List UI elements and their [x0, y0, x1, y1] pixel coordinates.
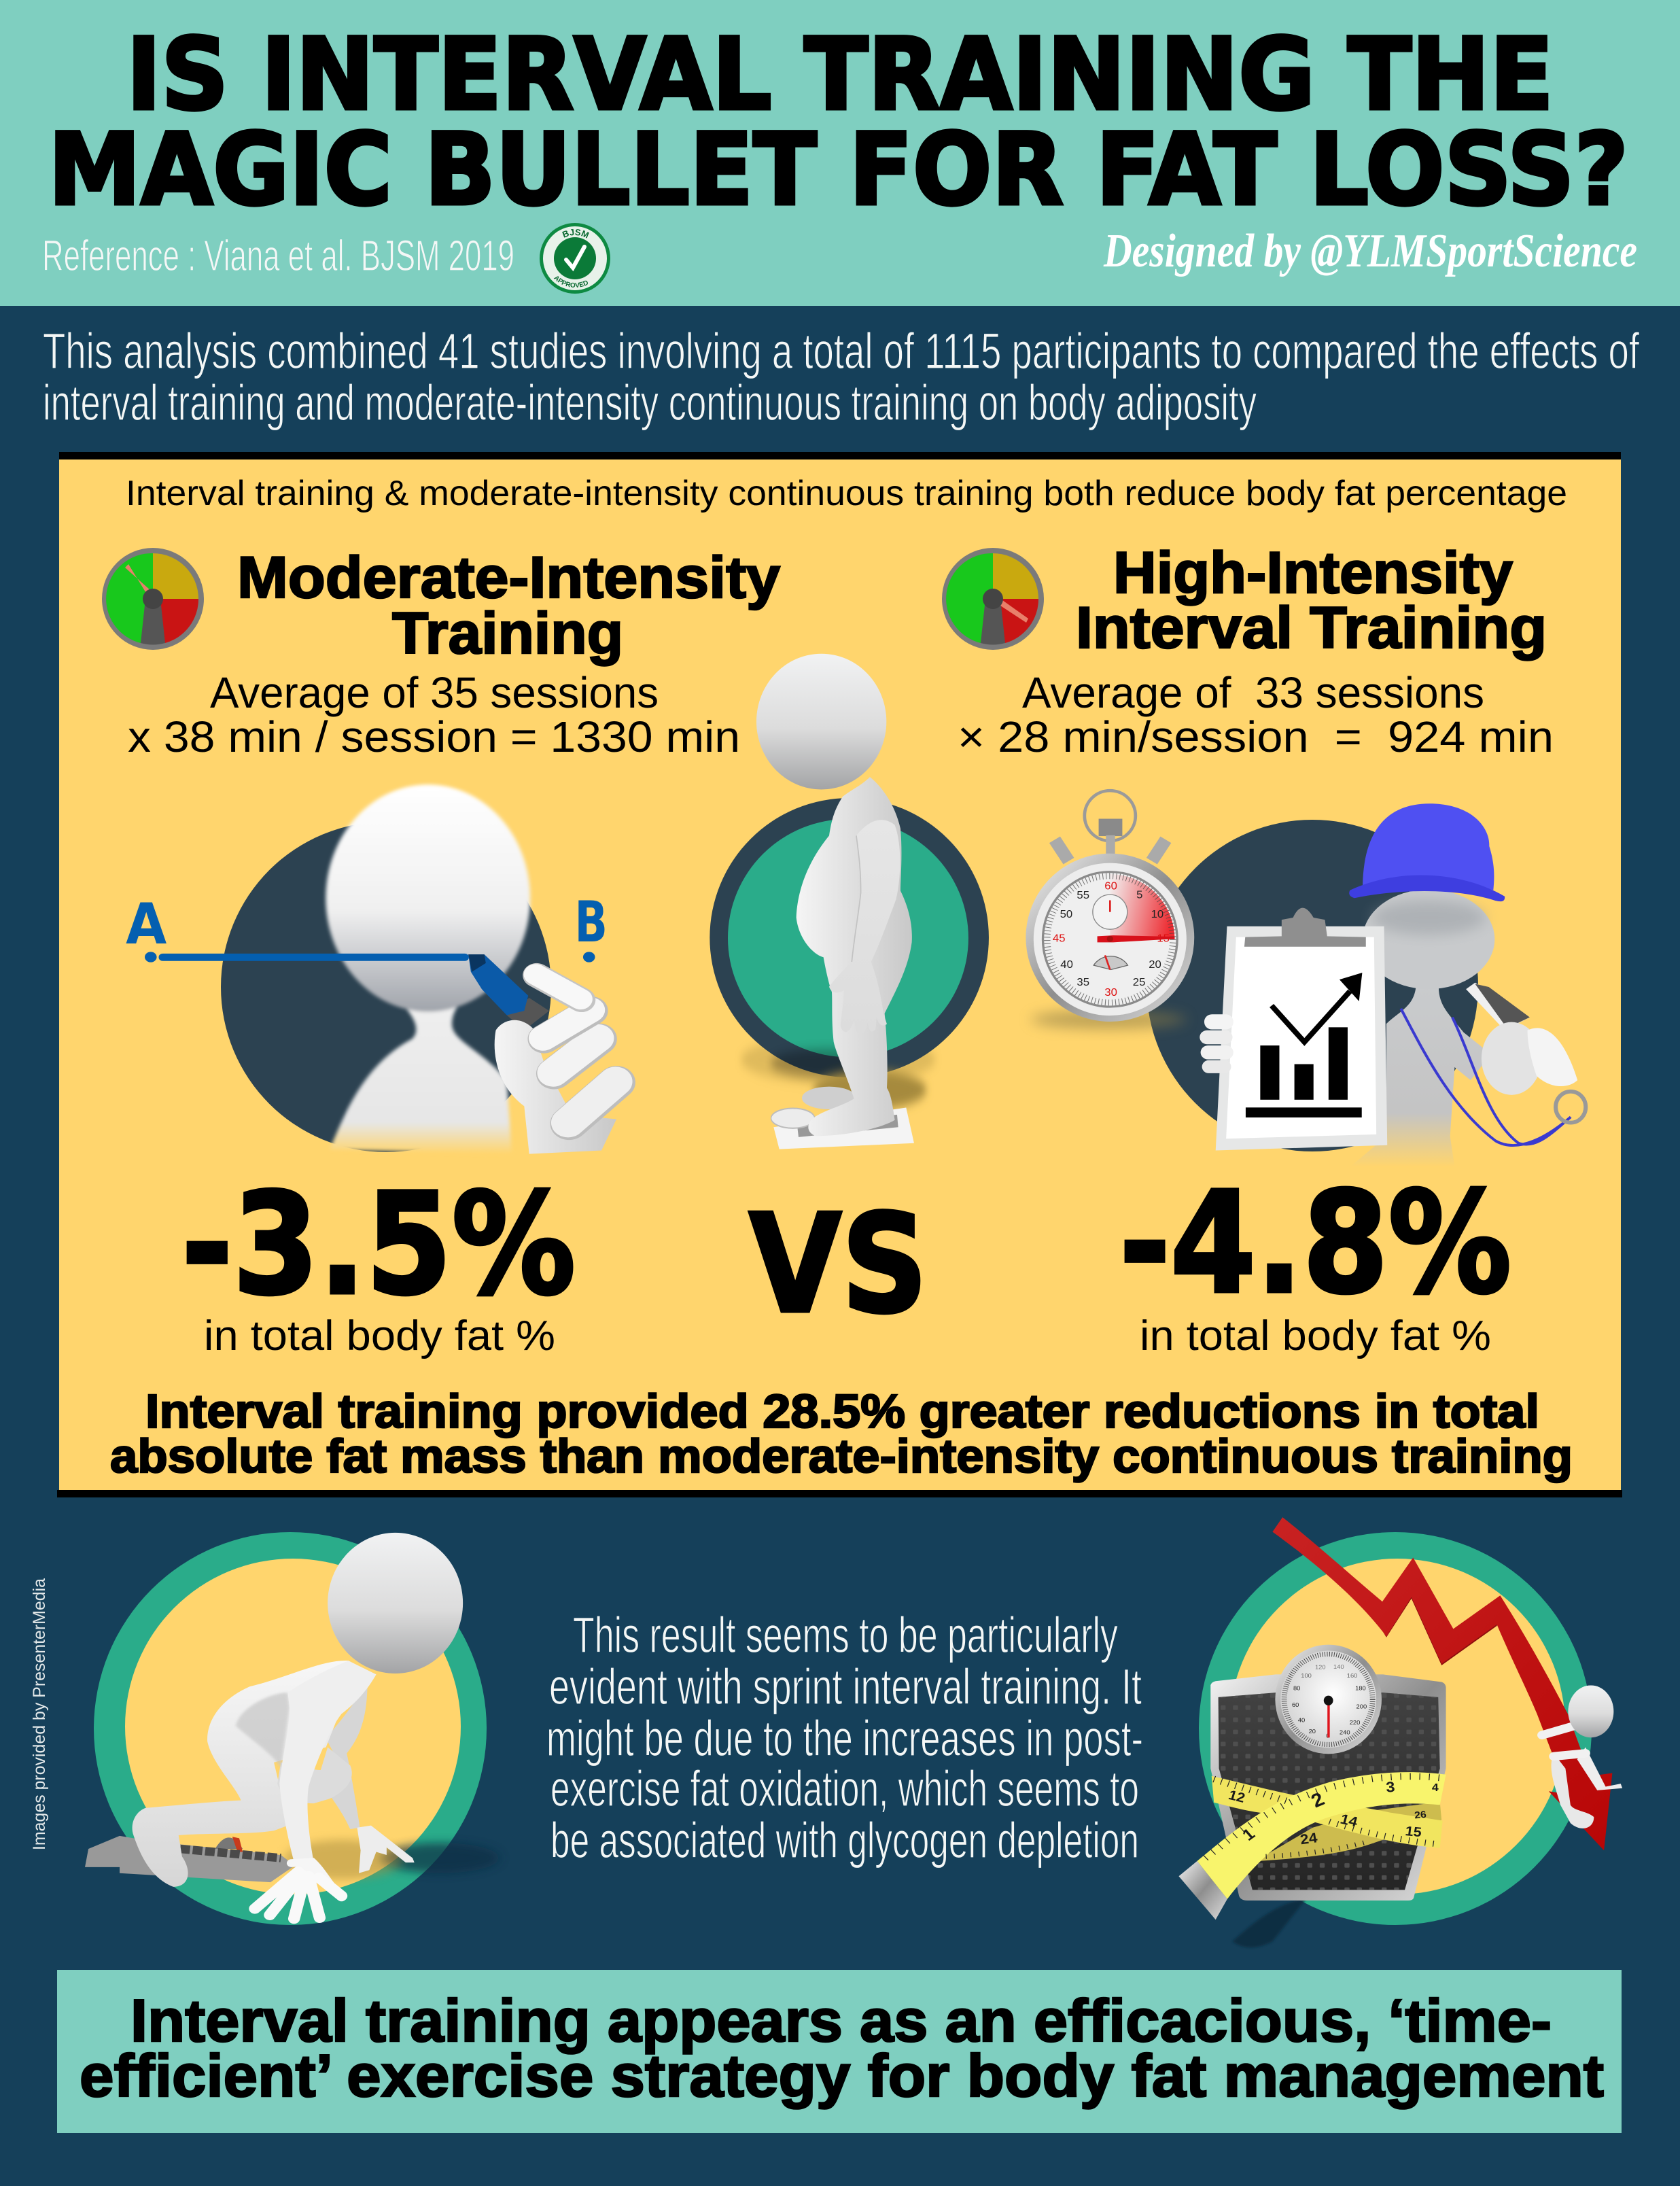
scale dial: 60 — [1292, 1702, 1299, 1708]
explanation text: be associated with glycogen depletion — [550, 1812, 1139, 1869]
icon: BJSM approved badge: BJSM — [562, 229, 589, 238]
heading: high-intensity interval: High-Intensity — [1113, 540, 1513, 606]
bathroom scale — [1210, 1645, 1446, 1901]
icon: gauge interval — [942, 548, 1044, 650]
coach figure — [1349, 803, 1586, 1167]
icon: stopwatch: 15 — [1157, 933, 1170, 945]
tape measure: 4 — [1432, 1782, 1439, 1794]
statistic: moderate: -3.5% — [181, 1163, 576, 1326]
front arm — [279, 1661, 377, 1862]
reference line: Reference : Viana et al. BJSM 2019 — [42, 231, 514, 280]
small figure on arrow — [1542, 1685, 1622, 1828]
interval session numbers: Average of 33 sessions — [1022, 668, 1484, 717]
explanation text: evident with sprint interval training. It — [549, 1659, 1142, 1715]
key finding — [110, 1385, 1573, 1482]
scale dial: 180 — [1355, 1685, 1366, 1691]
tape measure: 1 — [1239, 1825, 1259, 1844]
marker and hand — [468, 954, 616, 1154]
moderate session numbers — [128, 668, 740, 761]
statistic: interval: -4.8% — [1119, 1162, 1511, 1325]
tape measure: 24 — [1299, 1829, 1318, 1847]
icon: stopwatch: 10 — [1151, 908, 1163, 920]
scale dial: 140 — [1333, 1663, 1344, 1670]
clipboard with chart — [1216, 908, 1387, 1150]
scale dial — [1275, 1645, 1382, 1754]
illustration: figure drawing a line — [126, 784, 616, 1154]
icon: stopwatch: 55 — [1077, 889, 1089, 901]
title — [48, 17, 1628, 228]
explanation text: might be due to the increases in post- — [546, 1710, 1143, 1767]
tape measure: 14 — [1339, 1811, 1359, 1830]
intro text — [43, 323, 1639, 431]
caption: moderate: in total body fat % — [204, 1313, 555, 1359]
rear hand — [357, 1826, 415, 1873]
icon: stopwatch: 5 — [1136, 889, 1142, 901]
icon: gauge moderate — [102, 548, 204, 650]
icon: stopwatch: 20 — [1149, 958, 1161, 971]
shadow — [381, 1843, 500, 1873]
icon: stopwatch: 25 — [1133, 976, 1145, 988]
head — [328, 1533, 463, 1673]
shadow — [1232, 1899, 1306, 1947]
conclusion banner — [57, 1970, 1622, 2133]
figure arm and hand — [829, 820, 900, 1034]
explanation text: exercise fat oxidation, which seems to — [550, 1760, 1139, 1817]
tape measure: 2 — [1308, 1789, 1328, 1812]
conclusion banner: Interval training appears as an efficacious, ‘time- — [130, 1987, 1552, 2054]
illustration: scale, tape and falling arrow — [1178, 1517, 1622, 1947]
heading: moderate-intensity: Moderate-Intensity — [237, 545, 780, 610]
moderate session numbers: Average of 35 sessions — [210, 668, 659, 717]
header band — [0, 0, 1680, 306]
panel subtitle: Interval training & moderate-intensity continuous training both reduce body fat percentage — [126, 474, 1567, 513]
scale dial: 20 — [1309, 1728, 1316, 1735]
body and rear leg — [133, 1661, 374, 1887]
icon: stopwatch: 35 — [1077, 976, 1089, 988]
figure body — [797, 777, 912, 1136]
heading: high-intensity interval — [1076, 540, 1547, 661]
tape measure: 3 — [1385, 1779, 1395, 1795]
drawn line — [145, 952, 595, 962]
scale dial: 0 — [1326, 1733, 1329, 1739]
coach left hand — [1200, 1014, 1233, 1073]
explanation text: This result seems to be particularly — [573, 1607, 1118, 1663]
starting block — [85, 1836, 295, 1882]
illustration: sprinter — [85, 1532, 500, 1925]
scale dial: 120 — [1315, 1664, 1326, 1670]
icon: BJSM approved badge: APPROVED — [553, 276, 588, 288]
red downward arrow — [1272, 1517, 1612, 1850]
key finding: absolute fat mass than moderate-intensity continuous training — [110, 1429, 1573, 1482]
title: IS INTERVAL TRAINING THE — [126, 17, 1554, 133]
scale dial: 220 — [1350, 1719, 1360, 1726]
front hand — [255, 1862, 342, 1919]
image credit: Images provided by PresenterMedia — [30, 1578, 49, 1850]
illustration: stopwatch and coach — [1026, 791, 1586, 1167]
rear foot — [802, 1087, 856, 1109]
outer circle — [710, 798, 989, 1077]
scale dial: 100 — [1301, 1672, 1312, 1679]
figure head — [326, 784, 530, 1011]
scale dial: 40 — [1298, 1717, 1305, 1723]
caption: interval: in total body fat % — [1140, 1313, 1491, 1359]
icon: BJSM approved badge — [540, 223, 610, 294]
tape measure: 26 — [1414, 1809, 1427, 1821]
icon: stopwatch: 50 — [1060, 908, 1072, 920]
icon: stopwatch — [1026, 791, 1194, 1029]
figure body — [330, 998, 512, 1154]
tape measure — [1178, 1772, 1446, 1920]
conclusion banner: efficient’ exercise strategy for body fat management — [80, 2042, 1604, 2109]
explanation text — [546, 1607, 1143, 1869]
heading: high-intensity interval: Interval Training — [1076, 595, 1547, 661]
tape measure: 12 — [1227, 1788, 1247, 1806]
illustration: overweight figure on scale — [710, 654, 989, 1149]
scale dial: 80 — [1293, 1685, 1300, 1691]
icon: stopwatch: 30 — [1104, 986, 1117, 999]
heading: moderate-intensity — [237, 545, 780, 666]
icon: stopwatch: 60 — [1104, 880, 1117, 892]
whistle and hand — [1466, 983, 1530, 1030]
interval session numbers: × 28 min/session = 924 min — [958, 712, 1554, 761]
letter B: B — [574, 890, 608, 955]
icon: stopwatch: 45 — [1053, 933, 1066, 945]
front knee — [277, 1748, 352, 1803]
tape measure: 15 — [1404, 1824, 1422, 1840]
scale dial: 160 — [1347, 1672, 1357, 1679]
rear arm — [326, 1678, 368, 1829]
scale dial: 240 — [1340, 1729, 1350, 1735]
ground shadow — [741, 1035, 936, 1084]
moderate session numbers: x 38 min / session = 1330 min — [128, 712, 740, 761]
torso shade — [236, 1693, 290, 1769]
VS label: VS — [749, 1185, 928, 1344]
key finding: Interval training provided 28.5% greater reductions in total — [145, 1385, 1539, 1438]
figure head — [756, 654, 886, 789]
heading: moderate-intensity: Training — [392, 601, 623, 666]
panel: comparison — [57, 452, 1622, 1497]
interval session numbers — [958, 668, 1554, 761]
lanyard — [1401, 1009, 1571, 1145]
letter A: A — [126, 892, 167, 958]
scale plate — [771, 1071, 926, 1149]
icon: stopwatch: 40 — [1060, 958, 1073, 971]
scale dial: 200 — [1357, 1703, 1367, 1710]
inner circle — [728, 819, 968, 1057]
